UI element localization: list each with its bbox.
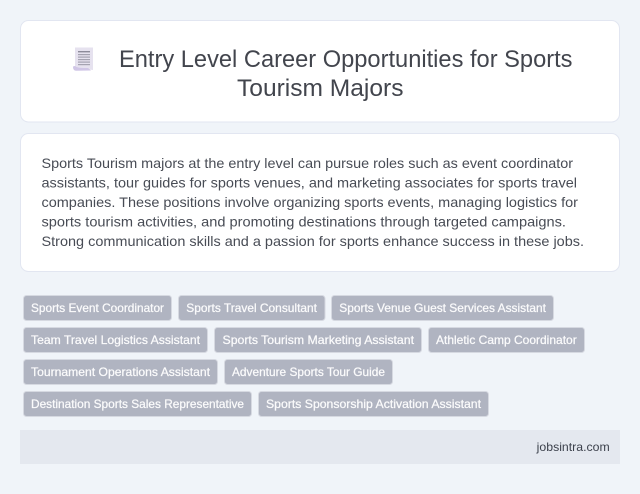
text block: description: sports tourism activities, and promoting destinations through targeted campaigns. <box>42 214 566 230</box>
tag: Tournament Operations Assistant: Tournament Operations Assistant <box>31 365 211 379</box>
footer source text: jobsintra.com <box>536 440 610 454</box>
tag: Sports Event Coordinator: Sports Event Coordinator <box>31 301 164 315</box>
tag: Team Travel Logistics Assistant <box>24 328 208 352</box>
tag: Sports Sponsorship Activation Assistant: Sports Sponsorship Activation Assistant <box>266 397 482 411</box>
tag: Sports Travel Consultant: Sports Travel Consultant <box>186 301 318 315</box>
tag: Sports Tourism Marketing Assistant: Sports Tourism Marketing Assistant <box>222 333 415 347</box>
tag: Sports Sponsorship Activation Assistant <box>258 392 488 416</box>
tag: Sports Tourism Marketing Assistant <box>214 328 422 352</box>
text block: description: companies. These positions involve organizing sports events, managing logistics for <box>42 194 578 210</box>
text block: description: assistants, tour guides for sports venues, and marketing associates for sports travel <box>42 174 577 190</box>
panel: header <box>20 20 620 122</box>
tag: Athletic Camp Coordinator: Athletic Camp Coordinator <box>436 333 577 347</box>
tag: Sports Venue Guest Services Assistant: Sports Venue Guest Services Assistant <box>339 301 547 315</box>
icon: document scroll <box>73 48 93 71</box>
footer <box>20 430 620 464</box>
title: Entry Level Career Opportunities for Sports <box>119 46 572 73</box>
text block: description: Strong communication skills and a passion for sports enhance success in these jobs. <box>42 233 584 249</box>
panel: description <box>20 134 620 272</box>
text block: description: Sports Tourism majors at the entry level can pursue roles such as event coordinator <box>42 155 573 171</box>
tag: Destination Sports Sales Representative <box>24 392 252 416</box>
tag: Sports Travel Consultant <box>178 296 325 320</box>
tag: Sports Venue Guest Services Assistant <box>332 296 554 320</box>
tag: Sports Event Coordinator <box>24 296 172 320</box>
tag: Tournament Operations Assistant <box>24 360 218 384</box>
tag: Adventure Sports Tour Guide <box>224 360 392 384</box>
title: Tourism Majors <box>237 75 404 102</box>
text block: description <box>42 155 584 249</box>
tag: Destination Sports Sales Representative: Destination Sports Sales Representative <box>31 397 244 411</box>
tag: Team Travel Logistics Assistant: Team Travel Logistics Assistant <box>31 333 201 347</box>
title <box>119 46 572 102</box>
tag: Adventure Sports Tour Guide: Adventure Sports Tour Guide <box>232 365 385 379</box>
job tags <box>24 296 584 416</box>
tag: Athletic Camp Coordinator <box>428 328 584 352</box>
